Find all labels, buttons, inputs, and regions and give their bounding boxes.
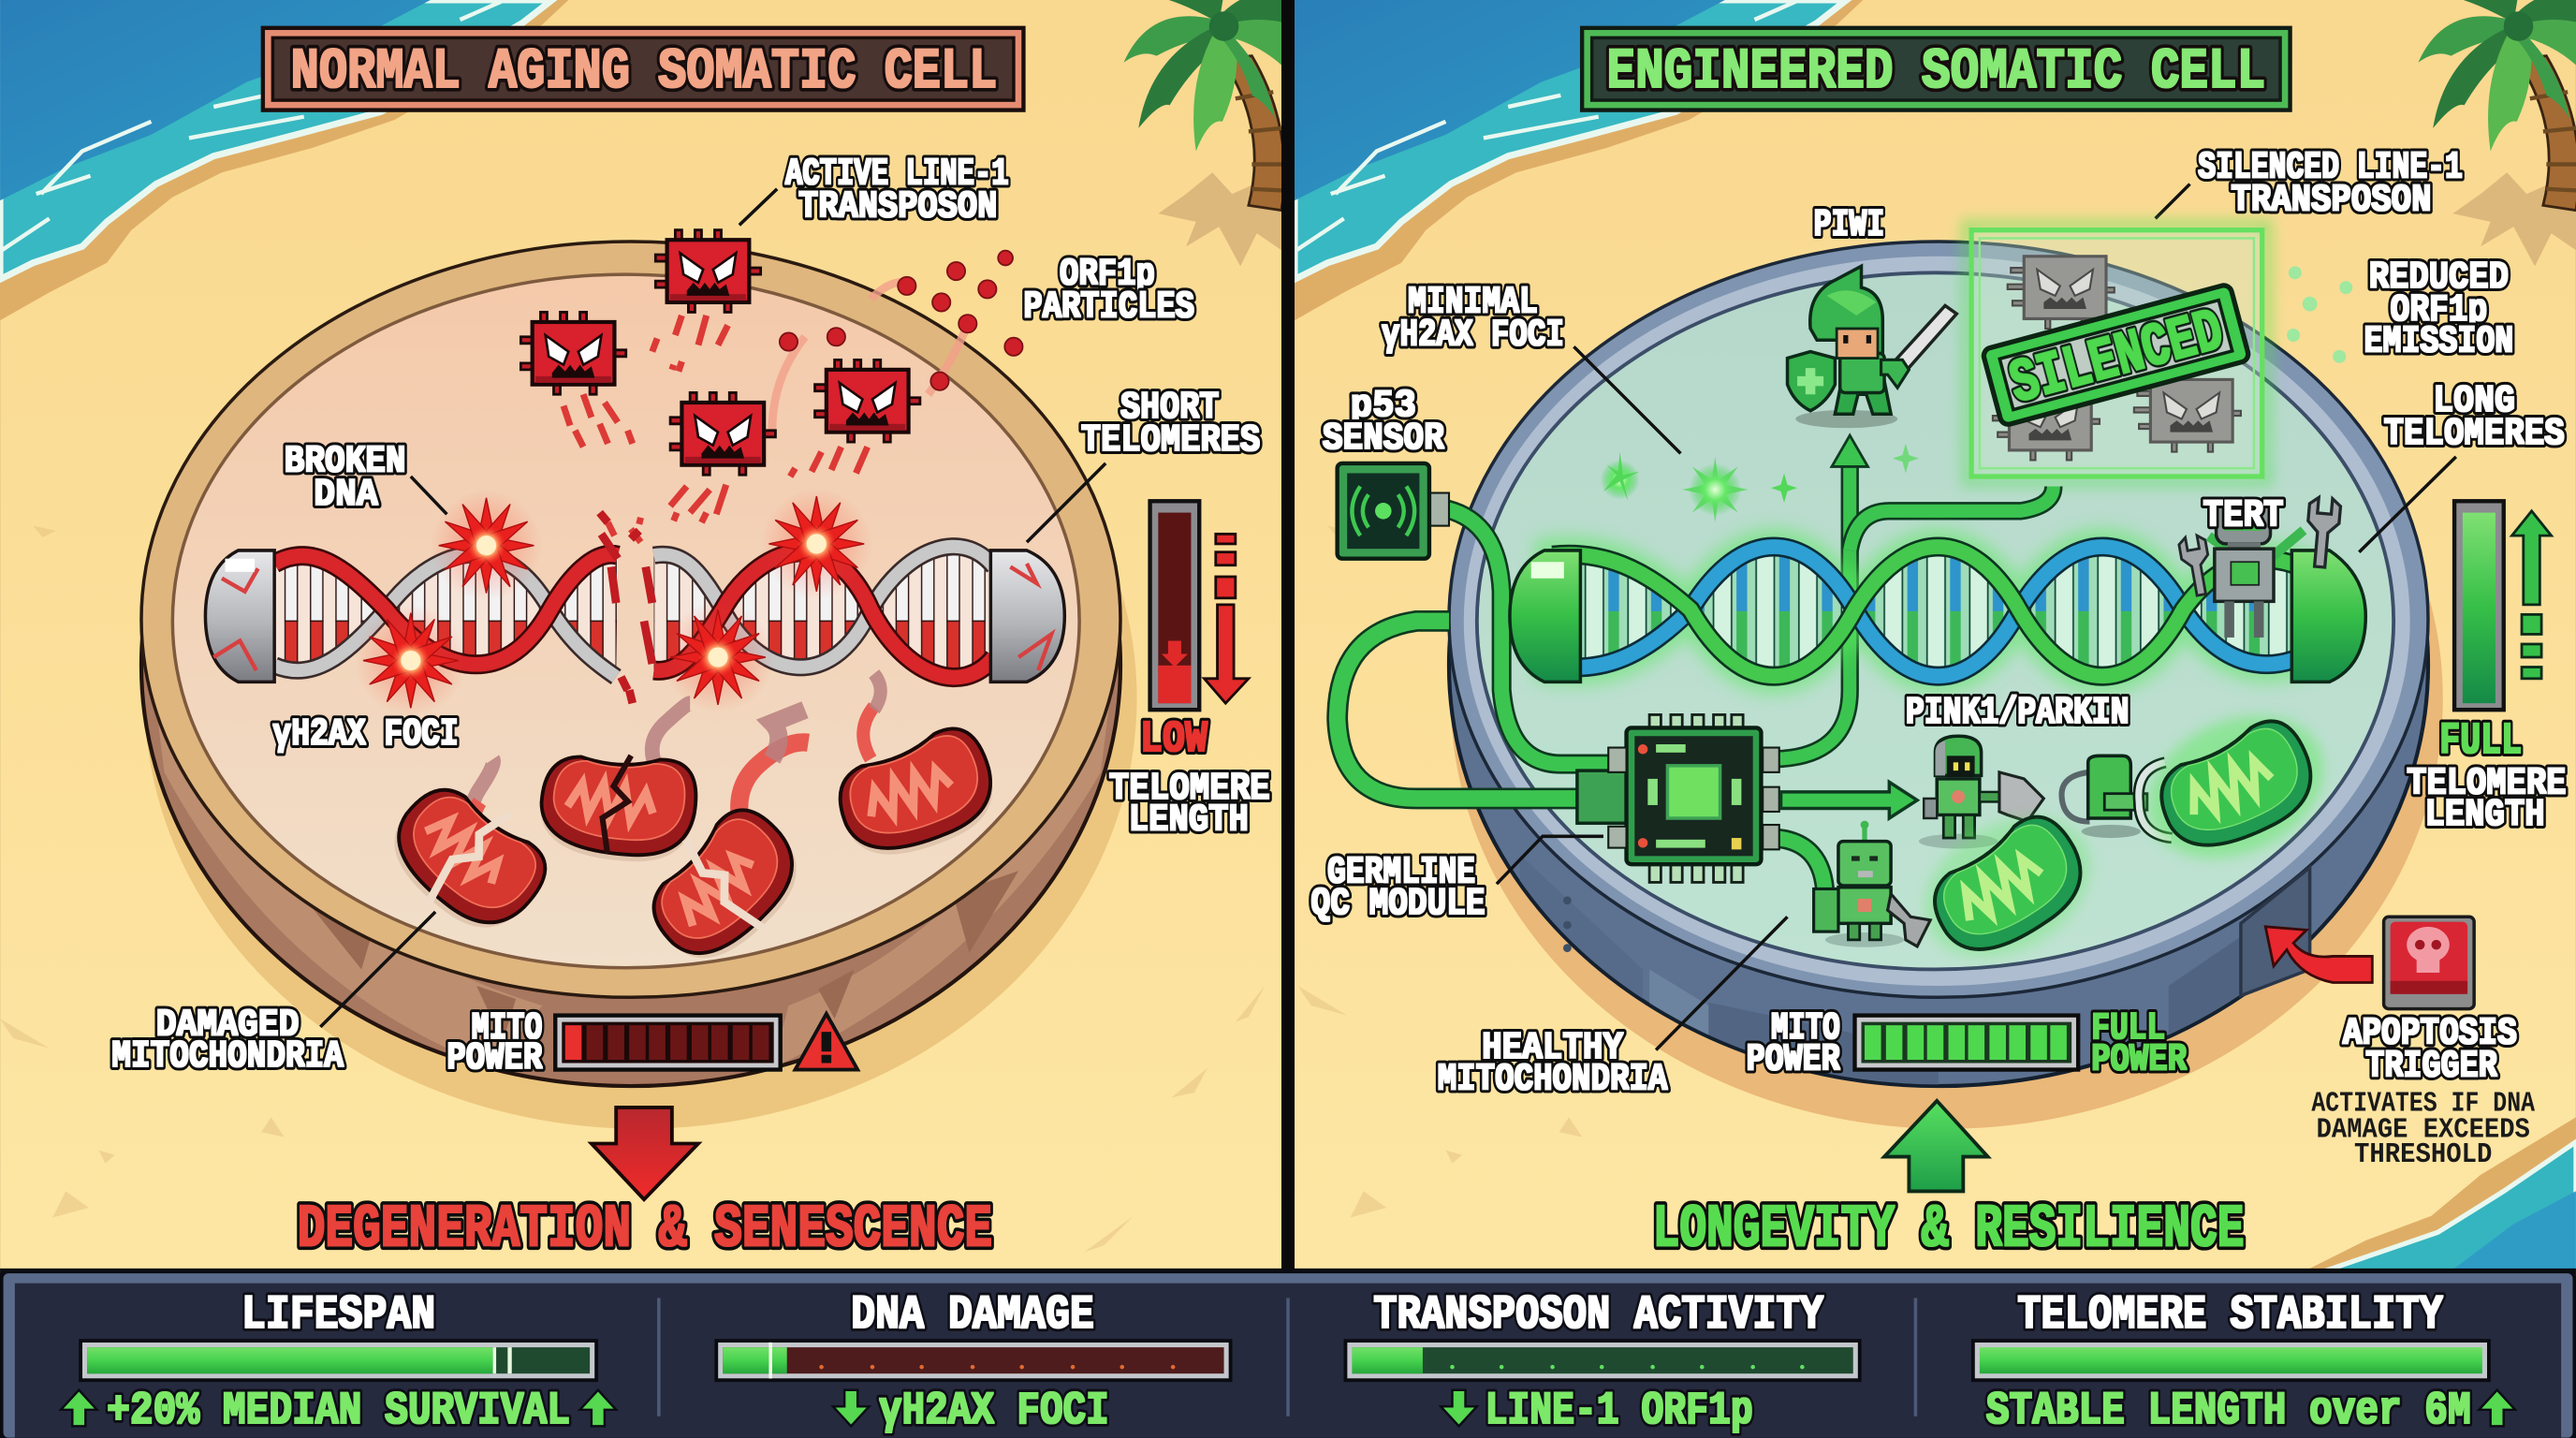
arrow: telomere shortening <box>1204 534 1249 703</box>
damaged mitochondria <box>373 674 1006 980</box>
label: broken DNA <box>285 441 406 517</box>
cell disc: metal chassis <box>1449 242 2443 1129</box>
label: active LINE-1 transposon: TRANSPOSON <box>798 186 997 229</box>
metric: transposon activity: TRANSPOSON ACTIVITY <box>1373 1289 1824 1343</box>
label: minimal gamma H2AX foci: γH2AX FOCI <box>1382 315 1564 358</box>
icon: repair robot <box>1814 821 1930 947</box>
title: engineered somatic cell: ENGINEERED SOMATIC CELL <box>1606 40 2265 105</box>
icon: PINK1 robot <box>1919 736 2043 848</box>
palm tree <box>1123 0 1298 266</box>
label: telomere length <box>2407 763 2566 837</box>
note: apoptosis threshold: THRESHOLD <box>2354 1138 2492 1171</box>
label: TERT: TERT <box>2203 495 2284 538</box>
icon: warning triangle <box>795 1014 857 1070</box>
label: ORF1p particles: ORF1p <box>1060 254 1155 297</box>
label: damaged mitochondria <box>111 1005 344 1078</box>
label: germline QC module: GERMLINE <box>1327 851 1475 894</box>
reduced ORF1p emission particles <box>2287 266 2352 363</box>
label: telomere length: LENGTH <box>2424 794 2545 837</box>
label: PINK1/PARKIN: PINK1/PARKIN <box>1906 692 2130 735</box>
silenced transposon box <box>1967 225 2267 481</box>
label: long telomeres <box>2384 380 2565 456</box>
telomere length gauge: full <box>2454 501 2504 710</box>
beach: ocean shoreline <box>0 0 568 320</box>
arrow: decline <box>592 1108 698 1199</box>
leader lines <box>320 189 1105 1027</box>
label: short telomeres: TELOMERES <box>1081 419 1260 462</box>
telomere caps long <box>1510 550 2365 682</box>
label: broken DNA: BROKEN <box>285 441 406 484</box>
leader lines <box>1497 184 2456 1049</box>
label: apoptosis trigger: TRIGGER <box>2365 1046 2497 1089</box>
arrow: mitophagy signal <box>1781 782 1917 818</box>
metric: DNA damage <box>716 1289 1231 1437</box>
DNA helix damaged <box>274 513 994 703</box>
active LINE-1 transposons <box>520 230 920 475</box>
label: mito power <box>1747 1007 1840 1082</box>
label: silenced LINE-1 transposon: TRANSPOSON <box>2231 180 2431 223</box>
note: apoptosis threshold <box>2311 1087 2536 1171</box>
label: PIWI: PIWI <box>1814 204 1884 247</box>
icon: TERT robot with wrenches <box>2178 497 2341 638</box>
label: healthy mitochondria: HEALTHY <box>1482 1027 1624 1070</box>
label: short telomeres <box>1081 387 1260 462</box>
telomere caps short <box>205 550 1064 682</box>
ORF1p particles <box>772 251 1023 431</box>
icon: p53 sensor <box>1338 463 1449 559</box>
label: germline QC module: QC MODULE <box>1311 883 1486 926</box>
beach: ocean shoreline <box>1295 0 1863 320</box>
label: minimal gamma H2AX foci <box>1382 281 1564 358</box>
arrow: apoptosis to chassis <box>2265 927 2372 983</box>
title: normal aging somatic cell: NORMAL AGING SOMATIC CELL <box>291 40 997 105</box>
DNA helix healthy <box>1553 547 2317 676</box>
arrow: telomere extension <box>2511 511 2552 679</box>
panel: normal aging somatic cell <box>0 0 1298 1273</box>
outcome: degeneration and senescence: DEGENERATION & SENESCENCE <box>298 1196 992 1264</box>
label: mito power: MITO <box>1771 1007 1840 1050</box>
label: full power: FULL <box>2091 1007 2165 1050</box>
label: full power: POWER <box>2091 1039 2188 1082</box>
mito power bar low <box>555 1016 781 1070</box>
label: low: LOW <box>1140 715 1208 765</box>
metric: lifespan: LIFESPAN <box>242 1289 435 1343</box>
metric: telomere stability: STABLE LENGTH over 6M <box>1986 1385 2471 1437</box>
beach: lower right ocean <box>2300 1117 2576 1273</box>
label: healthy mitochondria: MITOCHONDRIA <box>1438 1059 1668 1102</box>
label: p53 sensor: SENSOR <box>1323 418 1444 461</box>
label: p53 sensor: p53 <box>1351 385 1416 428</box>
label: apoptosis trigger <box>2343 1012 2517 1089</box>
label: mito power: POWER <box>446 1037 543 1080</box>
metric: transposon activity: LINE-1 ORF1p <box>1486 1385 1753 1437</box>
title: engineered somatic cell <box>1582 28 2291 110</box>
label: reduced ORF1p emission: EMISSION <box>2364 321 2513 364</box>
label: active LINE-1 transposon: ACTIVE LINE-1 <box>785 154 1009 197</box>
icon: PARKIN clamp robot <box>2062 756 2172 838</box>
label: ORF1p particles <box>1023 254 1194 330</box>
arrow: piwi activation <box>1832 435 1868 466</box>
mito power bar full <box>1854 1016 2078 1070</box>
arrow: improvement <box>1884 1101 1988 1191</box>
label: silenced LINE-1 transposon <box>2198 147 2463 223</box>
label: full power <box>2091 1007 2188 1082</box>
label: germline QC module <box>1311 851 1486 926</box>
label: reduced ORF1p emission <box>2364 257 2513 364</box>
metric: telomere stability <box>1973 1289 2515 1437</box>
icon: PIWI knight <box>1788 266 1956 428</box>
label: mito power <box>446 1007 543 1080</box>
silenced stamp: SILENCED <box>2003 298 2231 420</box>
label: damaged mitochondria: DAMAGED <box>156 1005 299 1048</box>
metric: telomere stability: TELOMERE STABILITY <box>2017 1289 2443 1343</box>
label: damaged mitochondria: MITOCHONDRIA <box>111 1035 344 1078</box>
label: p53 sensor <box>1323 385 1444 461</box>
label: ORF1p particles: PARTICLES <box>1023 286 1194 330</box>
label: silenced LINE-1 transposon: SILENCED LINE-1 <box>2198 147 2463 190</box>
label: broken DNA: DNA <box>314 474 378 517</box>
label: reduced ORF1p emission: ORF1p <box>2391 289 2487 332</box>
label: apoptosis trigger: APOPTOSIS <box>2343 1012 2517 1055</box>
panel: engineered somatic cell <box>1295 0 2576 1273</box>
telomere length gauge: low <box>1150 501 1199 710</box>
transposon debris streaks <box>564 315 868 542</box>
gamma H2AX foci bursts <box>345 478 882 726</box>
label: mito power: MITO <box>472 1007 542 1050</box>
healthy mitochondria <box>1899 688 2347 986</box>
label: gamma H2AX foci: γH2AX FOCI <box>272 713 459 756</box>
glowing pathways: cables and arrows <box>1338 460 2054 895</box>
metric: transposon activity <box>1345 1289 1860 1437</box>
label: telomere length <box>1109 768 1270 842</box>
icon: skull apoptosis button <box>2384 917 2474 1009</box>
label: active LINE-1 transposon <box>785 154 1009 229</box>
metrics bar <box>0 1269 2576 1438</box>
title: normal aging somatic cell <box>263 28 1023 110</box>
metric: lifespan: +20% MEDIAN SURVIVAL <box>107 1385 570 1437</box>
label: long telomeres: LONG <box>2433 380 2515 423</box>
note: apoptosis threshold: DAMAGE EXCEEDS <box>2317 1113 2530 1146</box>
label: full: FULL <box>2439 717 2522 767</box>
metric: DNA damage: DNA DAMAGE <box>851 1289 1094 1343</box>
label: short telomeres: SHORT <box>1120 387 1219 430</box>
label: telomere length: LENGTH <box>1129 799 1249 842</box>
outcome: longevity and resilience: LONGEVITY & RESILIENCE <box>1653 1196 2244 1264</box>
palm tree <box>2418 0 2576 266</box>
label: reduced ORF1p emission: REDUCED <box>2369 257 2509 300</box>
cell disc: crust dish <box>141 242 1137 1129</box>
label: telomere length: TELOMERE <box>1109 768 1270 811</box>
metric: DNA damage: γH2AX FOCI <box>879 1385 1109 1437</box>
label: minimal gamma H2AX foci: MINIMAL <box>1408 281 1538 324</box>
metric: lifespan <box>61 1289 616 1437</box>
QC chip: germline module <box>1577 714 1779 882</box>
gamma H2AX sparks minimal <box>1600 444 1919 522</box>
label: mito power: POWER <box>1747 1039 1840 1082</box>
label: healthy mitochondria <box>1438 1027 1668 1102</box>
